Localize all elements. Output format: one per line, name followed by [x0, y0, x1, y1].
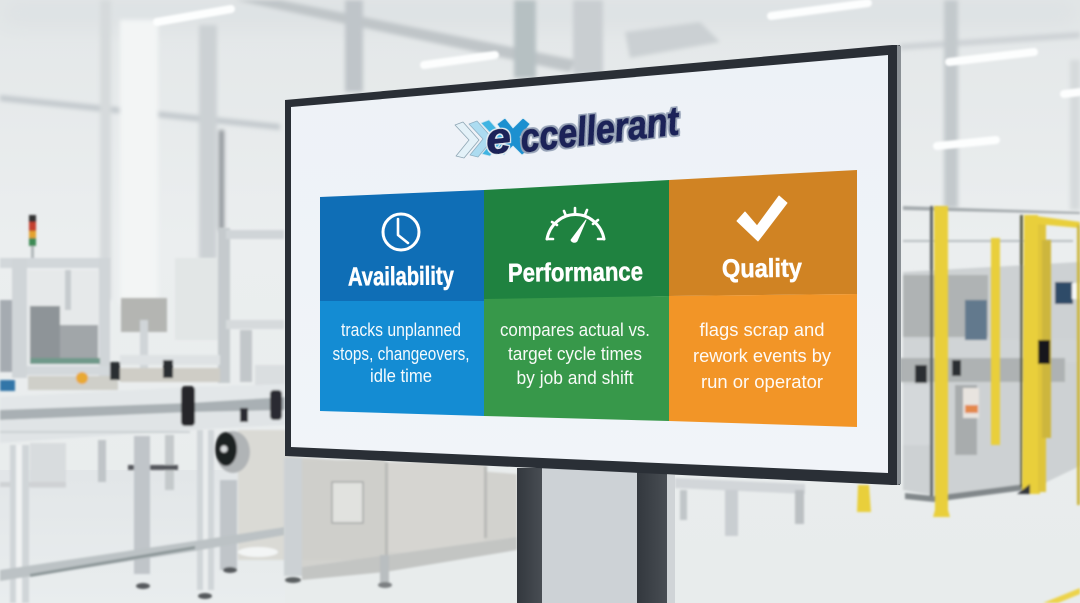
logo wordmark: ccellerant	[518, 99, 682, 161]
safety fence	[900, 206, 1080, 502]
ceiling structure	[0, 0, 1080, 305]
performance header block	[484, 180, 669, 301]
performance heading: Performance	[508, 256, 643, 288]
performance body block	[484, 296, 669, 421]
icon: check mark	[737, 196, 787, 241]
grey machine cabinet under the screen	[284, 456, 517, 588]
logo letter e: e	[483, 113, 513, 164]
panel: performance	[484, 180, 669, 421]
availability header block	[320, 190, 484, 301]
quality body block	[669, 294, 857, 427]
panel: quality	[669, 170, 857, 427]
floor stripe	[1043, 588, 1080, 603]
performance description	[500, 319, 650, 388]
availability description	[332, 319, 470, 386]
quality heading: Quality	[722, 253, 803, 283]
availability description: tracks unplanned	[341, 319, 461, 340]
logo: excellerant	[455, 99, 682, 164]
quality header block	[669, 170, 857, 296]
cabinet vent	[332, 482, 363, 523]
availability description: stops, changeovers,	[332, 343, 470, 364]
yellow safety posts	[857, 206, 1080, 517]
quality description: rework events by	[693, 345, 832, 366]
icon: speedometer gauge	[547, 208, 604, 242]
back conveyor box	[238, 430, 286, 560]
panel: availability	[320, 190, 484, 416]
display monitor	[285, 45, 901, 485]
conveyor legs	[10, 445, 29, 603]
performance description: target cycle times	[508, 343, 642, 364]
performance description: compares actual vs.	[500, 319, 650, 340]
availability heading: Availability	[348, 260, 454, 292]
handwheel	[215, 431, 250, 473]
availability body block	[320, 301, 484, 416]
right conveyor behind stand	[675, 478, 805, 536]
quality description: run or operator	[701, 371, 823, 392]
quality description	[693, 319, 832, 392]
icon: clock	[383, 214, 419, 250]
monitor frame	[285, 45, 900, 485]
logo chevrons	[455, 118, 530, 158]
stack light	[29, 215, 36, 258]
display stand	[517, 468, 675, 603]
ceiling lights	[157, 3, 1080, 146]
distant legs	[30, 443, 66, 488]
availability description: idle time	[370, 365, 432, 386]
monitor screen	[291, 55, 888, 473]
quality description: flags scrap and	[700, 319, 824, 340]
left machine and conveyor	[0, 215, 286, 603]
factory floor	[0, 470, 285, 603]
performance description: by job and shift	[516, 367, 634, 388]
